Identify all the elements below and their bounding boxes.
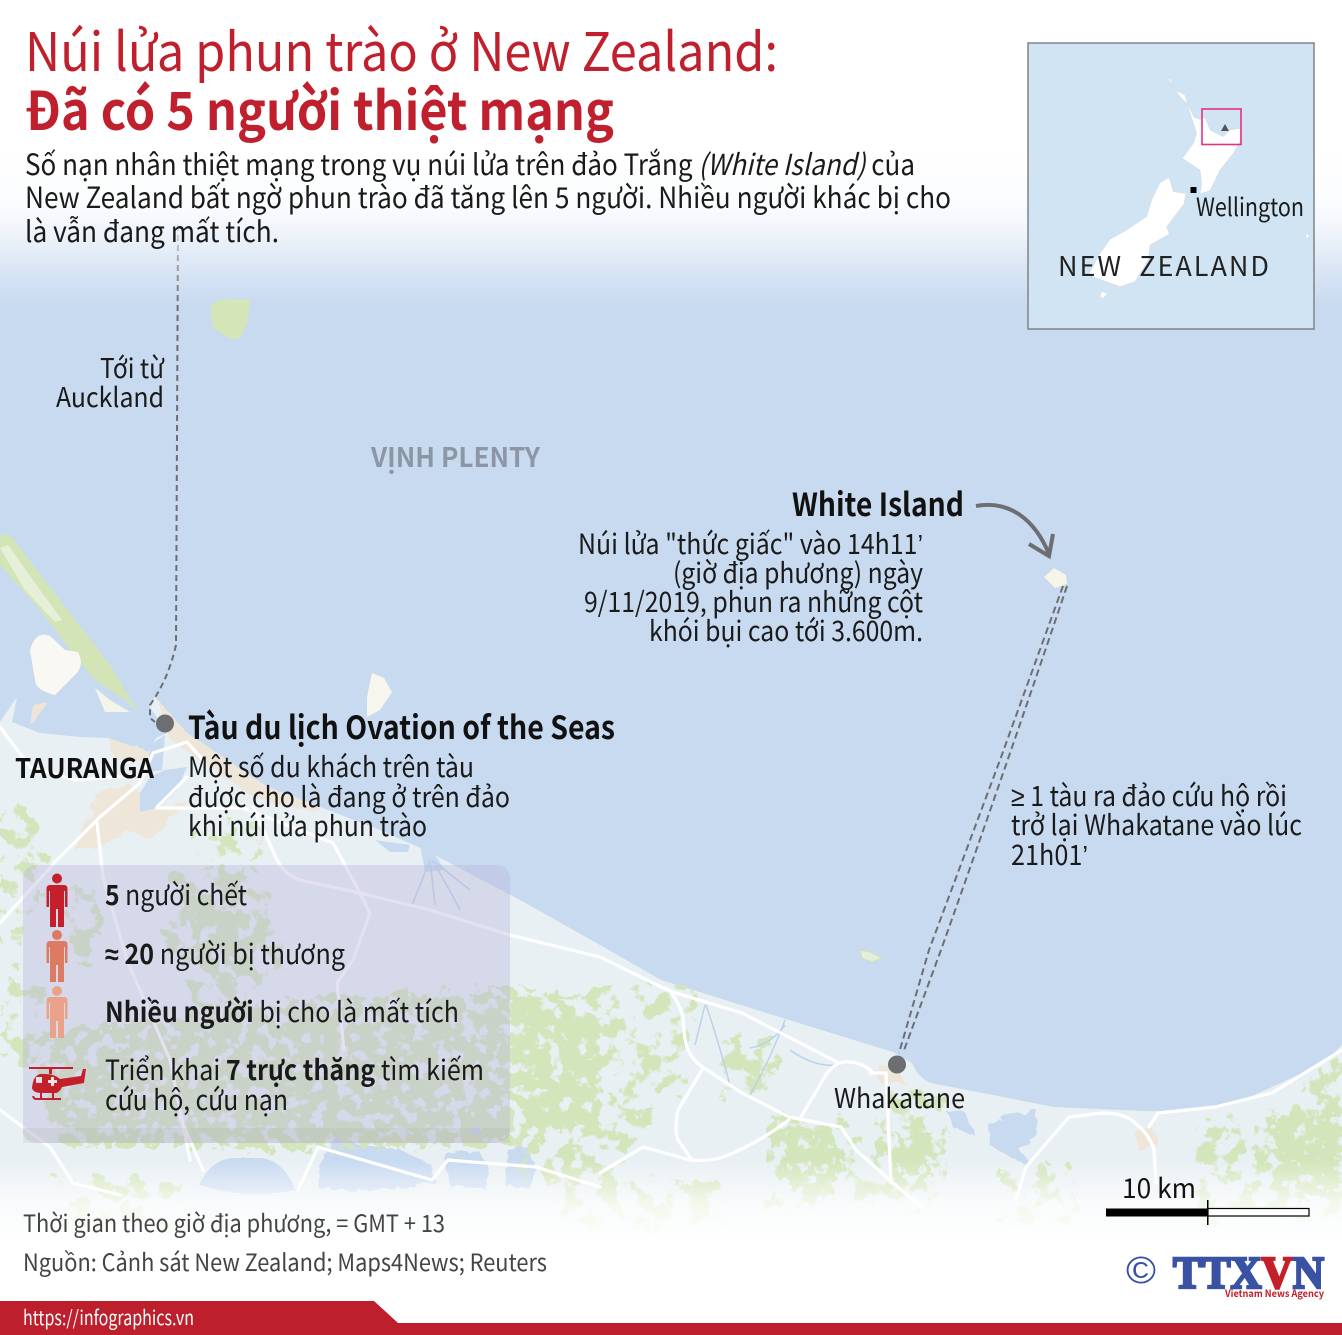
copyright and agency logo: TTXVN <box>1173 1247 1324 1298</box>
label: from Auckland: Tới từ <box>100 347 165 386</box>
inset: Wellington marker <box>1190 187 1196 193</box>
text: deaths: 5 người chết <box>105 874 247 914</box>
footnote: time zone: Thời gian theo giờ địa phương, = GMT + 13 <box>23 1204 445 1239</box>
label: Tauranga: TAURANGA <box>15 747 155 786</box>
map: forest patches <box>0 790 1342 1230</box>
title <box>25 11 778 146</box>
island: Mayor Island <box>210 299 250 339</box>
map: tan urban areas <box>75 697 1158 1150</box>
inset: Wellington label: Wellington <box>1196 188 1304 224</box>
map: dense forest <box>35 885 1342 1195</box>
title: Núi lửa phun trào ở New Zealand: <box>25 11 778 87</box>
label: Whakatane: Whakatane <box>834 1077 965 1116</box>
icon: helicopter <box>29 1067 86 1100</box>
text: eruption description: khói bụi cao tới 3.600m. <box>649 610 923 650</box>
map: harbour water and lakes <box>140 735 445 1194</box>
icon: dead person <box>46 874 68 927</box>
marker: cruise ship position <box>156 714 174 732</box>
scale bar: 10 km <box>1122 1167 1196 1206</box>
text: helicopters: cứu hộ, cứu nạn <box>105 1079 288 1119</box>
text: missing: Nhiều người bị cho là mất tích <box>105 991 459 1031</box>
intro text <box>25 142 951 251</box>
label: cruise ship: Tàu du lịch Ovation of the Seas <box>188 703 615 749</box>
text: cruise ship description: Một số du khách trên tàu <box>188 746 474 786</box>
label: Bay of Plenty: VỊNH PLENTY <box>370 436 540 475</box>
route: from Auckland <box>150 225 178 722</box>
inset map: New Zealand <box>1028 43 1314 329</box>
text: rescue boat note: 21h01’ <box>1011 834 1088 874</box>
icon: missing person <box>46 986 68 1038</box>
text: injured: ≈ 20 người bị thương <box>105 933 345 973</box>
arrow: to White Island <box>976 505 1053 556</box>
title: Đã có 5 người thiệt mạng <box>25 70 614 146</box>
label: White Island: White Island <box>792 480 964 526</box>
footnote: sources: Nguồn: Cảnh sát New Zealand; Maps4News; Reuters <box>23 1243 547 1278</box>
marker: Whakatane <box>888 1056 906 1074</box>
inset: white island locator <box>1202 109 1241 144</box>
text: cruise ship description <box>188 746 510 845</box>
label: from Auckland: Auckland <box>56 376 164 415</box>
footer bar <box>0 1301 1342 1335</box>
inset: volcano marker <box>1221 124 1229 131</box>
island: Whale Island <box>860 950 882 962</box>
inset: country label: NEW ZEALAND <box>1058 245 1269 284</box>
copyright and agency logo: © <box>1126 1250 1156 1292</box>
copyright and agency logo: Vietnam News Agency <box>1224 1285 1324 1300</box>
bottom white fade <box>0 1160 1342 1245</box>
map: irregular lakes <box>318 1108 1037 1190</box>
text: rescue boat note: ≥ 1 tàu ra đảo cứu hộ rồi <box>1011 775 1287 815</box>
intro text: là vẫn đang mất tích. <box>25 209 279 251</box>
text: eruption description: 9/11/2019, phun ra những cột <box>584 581 923 621</box>
map: roads <box>0 727 1342 1207</box>
text: eruption description: Núi lửa "thức giấc" vào 14h11’ <box>578 523 923 563</box>
text: cruise ship description: khi núi lửa phun trào <box>188 805 427 845</box>
intro text: New Zealand bất ngờ phun trào đã tăng lên 5 người. Nhiều người khác bị cho <box>25 175 951 217</box>
footer bar: https://infographics.vn <box>23 1302 194 1331</box>
inset: islands <box>1088 77 1309 298</box>
text: eruption description: (giờ địa phương) ngày <box>673 552 923 592</box>
panel: casualty figures <box>23 865 510 1143</box>
route: White Island to Whakatane <box>899 586 1067 1053</box>
label: from Auckland <box>56 347 165 415</box>
map: land <box>0 697 1342 1335</box>
map: Matakana Island strip <box>0 535 138 725</box>
text: helicopters <box>105 1049 484 1119</box>
text: rescue boat note: trở lại Whakatane vào lúc <box>1011 804 1302 844</box>
icon: injured person <box>46 930 68 982</box>
island: Motiti <box>367 673 392 717</box>
text: cruise ship description: được cho là đang ở trên đảo <box>188 776 510 816</box>
text: eruption description <box>578 523 923 650</box>
text: helicopters: Triển khai 7 trực thăng tìm kiếm <box>105 1049 484 1089</box>
intro text: Số nạn nhân thiệt mạng trong vụ núi lửa trên đảo Trắng (White Island) của <box>25 142 915 184</box>
text: rescue boat note <box>1011 775 1302 874</box>
island: White Island <box>1044 568 1067 588</box>
map: rivers <box>412 860 840 1095</box>
top white fade <box>0 0 1342 305</box>
scale bar <box>1106 1167 1309 1225</box>
